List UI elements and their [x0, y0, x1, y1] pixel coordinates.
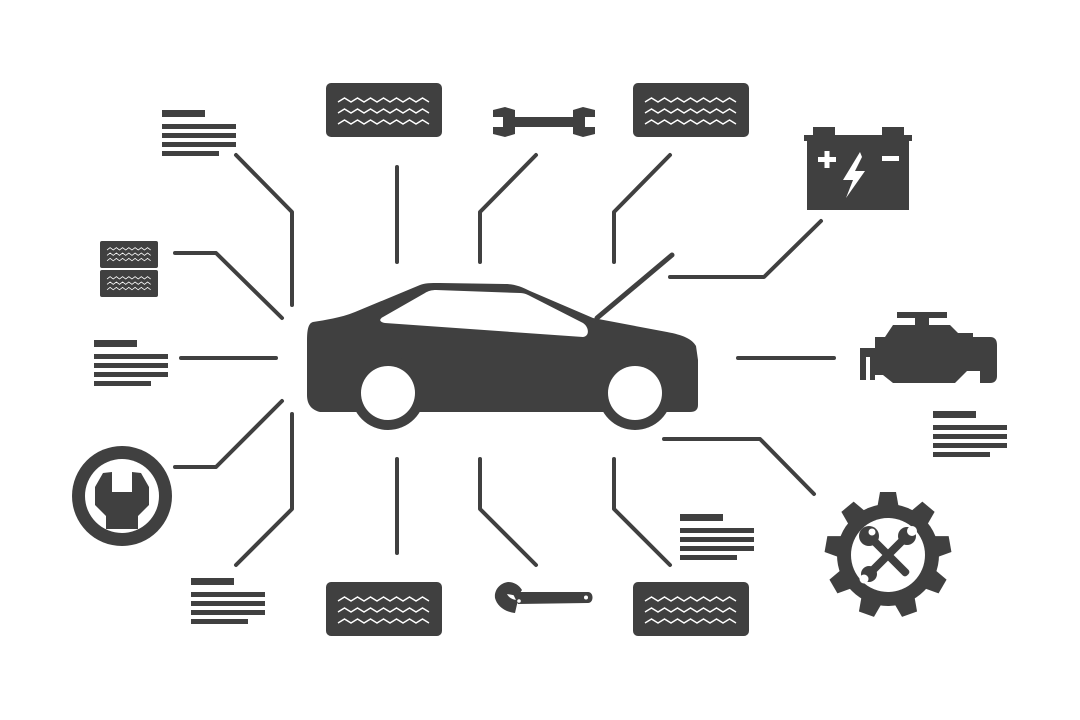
icon: circle wrench: [72, 446, 172, 546]
car with open hood: [307, 255, 698, 430]
icon: engine: [860, 312, 997, 383]
tire panel top-right: [633, 83, 749, 137]
text block top-left: [162, 110, 236, 156]
stacked tires left: [100, 241, 158, 297]
text block right: [933, 411, 1007, 457]
tire panel bottom-right: [633, 582, 749, 636]
text block bottom-left: [191, 578, 265, 624]
icon: top wrench: [493, 107, 595, 137]
text block left: [94, 340, 168, 386]
icon: gear with tools: [824, 492, 952, 618]
text block bottom-center-right: [680, 514, 754, 560]
connector lines: [175, 155, 834, 565]
icon: adjustable wrench: [495, 582, 592, 613]
icon: battery: [804, 127, 912, 210]
tire panel top-left: [326, 83, 442, 137]
tire panel bottom-left: [326, 582, 442, 636]
